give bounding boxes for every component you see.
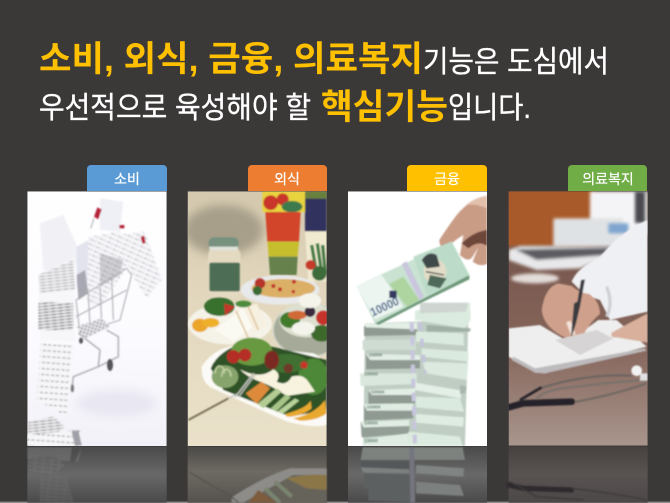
tab: 소비: 소비 [114, 171, 140, 187]
tab: 외식 [248, 165, 327, 191]
reflection: shopping cart [27, 447, 167, 503]
photo: stack of banknotes: 10000 [367, 404, 381, 410]
oval platter [202, 345, 327, 426]
jar drawn plainly [208, 247, 241, 297]
title line 1: 기능은 도심에서 [423, 46, 609, 79]
hand [439, 196, 487, 265]
tab: 의료복지: 의료복지 [582, 171, 634, 187]
reflection: restaurant food [188, 447, 327, 503]
panel: 소비 [27, 165, 167, 503]
photo: stack of banknotes: 10000 [368, 353, 382, 359]
title line 2 [39, 88, 531, 127]
photo: stack of banknotes: 10000 [364, 438, 378, 445]
photo: doctor writing with stethoscope [505, 188, 648, 446]
photo: restaurant food [188, 191, 327, 446]
photo: shopping cart with receipts [27, 191, 167, 446]
tab: 외식: 외식 [274, 171, 300, 187]
photo: stack of banknotes [348, 191, 487, 446]
panel: 금융 [348, 165, 487, 503]
tab: 소비 [87, 165, 167, 191]
title line 2: 우선적으로 육성해야 할 [39, 92, 311, 125]
photo: stack of banknotes: 10000 [364, 420, 378, 426]
reflection: stack of banknotes [348, 447, 487, 503]
title line 2: 입니다. [448, 92, 531, 125]
photo: stack of banknotes: 10000 [368, 294, 401, 319]
photo: stack of banknotes: 10000 [364, 372, 378, 378]
title [39, 40, 609, 127]
title line 2: 핵심기능 [321, 88, 448, 127]
tab: 금융: 금융 [434, 171, 460, 187]
panel: 외식 [188, 165, 328, 503]
title line 1: 소비, 외식, 금융, 의료복지 [39, 40, 423, 79]
tab: 의료복지 [568, 165, 647, 191]
photo: stack of banknotes: 10000 [371, 389, 385, 395]
tab: 금융 [407, 165, 487, 191]
title line 1 [39, 40, 609, 79]
reflection: doctor with stethoscope [509, 447, 648, 503]
panel: 의료복지 [505, 165, 648, 503]
banknote bundle [360, 259, 460, 324]
